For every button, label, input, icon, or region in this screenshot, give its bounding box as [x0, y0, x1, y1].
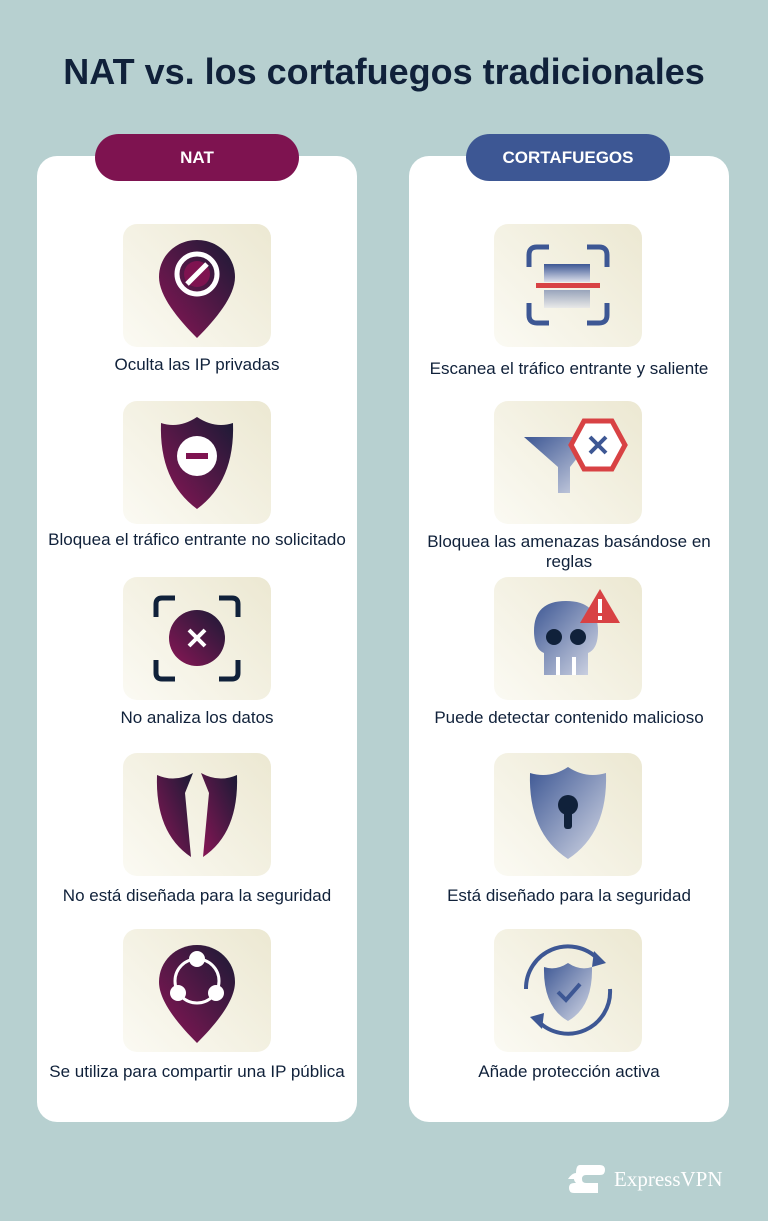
icon: shield minus [123, 401, 271, 524]
label: reglas [546, 552, 592, 571]
heading: NAT: NAT [180, 148, 214, 167]
icon: skull with warning [494, 577, 642, 700]
heading: CORTAFUEGOS: CORTAFUEGOS [503, 148, 633, 167]
icon: pin with network [123, 929, 271, 1052]
title: NAT vs. los cortafuegos tradicionales [63, 51, 705, 92]
label [427, 532, 711, 571]
label: Puede detectar contenido malicioso [434, 708, 704, 727]
logo: ExpressVPN: ExpressVPN [614, 1167, 722, 1191]
heading: CORTAFUEGOS [466, 134, 670, 181]
panel: cortafuegos [409, 156, 729, 1122]
label: Oculta las IP privadas [114, 355, 280, 374]
label: Añade protección activa [478, 1062, 660, 1081]
heading: NAT [95, 134, 299, 181]
panel: NAT [37, 156, 357, 1122]
label: No está diseñada para la seguridad [63, 886, 331, 905]
icon: location pin with ban [123, 224, 271, 347]
icon: shield keyhole [494, 753, 642, 876]
icon: split shield [123, 753, 271, 876]
icon: funnel with hexagon x [494, 401, 642, 524]
label: Se utiliza para compartir una IP pública [49, 1062, 345, 1081]
logo: ExpressVPN [568, 1165, 722, 1193]
label: No analiza los datos [120, 708, 274, 727]
icon: scan frame with x [123, 577, 271, 700]
icon: scanner [494, 224, 642, 347]
icon: shield check with arrows [494, 929, 642, 1052]
label: Está diseñado para la seguridad [447, 886, 691, 905]
label: Bloquea el tráfico entrante no solicitado [48, 530, 346, 549]
label: Escanea el tráfico entrante y saliente [430, 359, 708, 378]
label: Bloquea las amenazas basándose en [427, 532, 711, 551]
